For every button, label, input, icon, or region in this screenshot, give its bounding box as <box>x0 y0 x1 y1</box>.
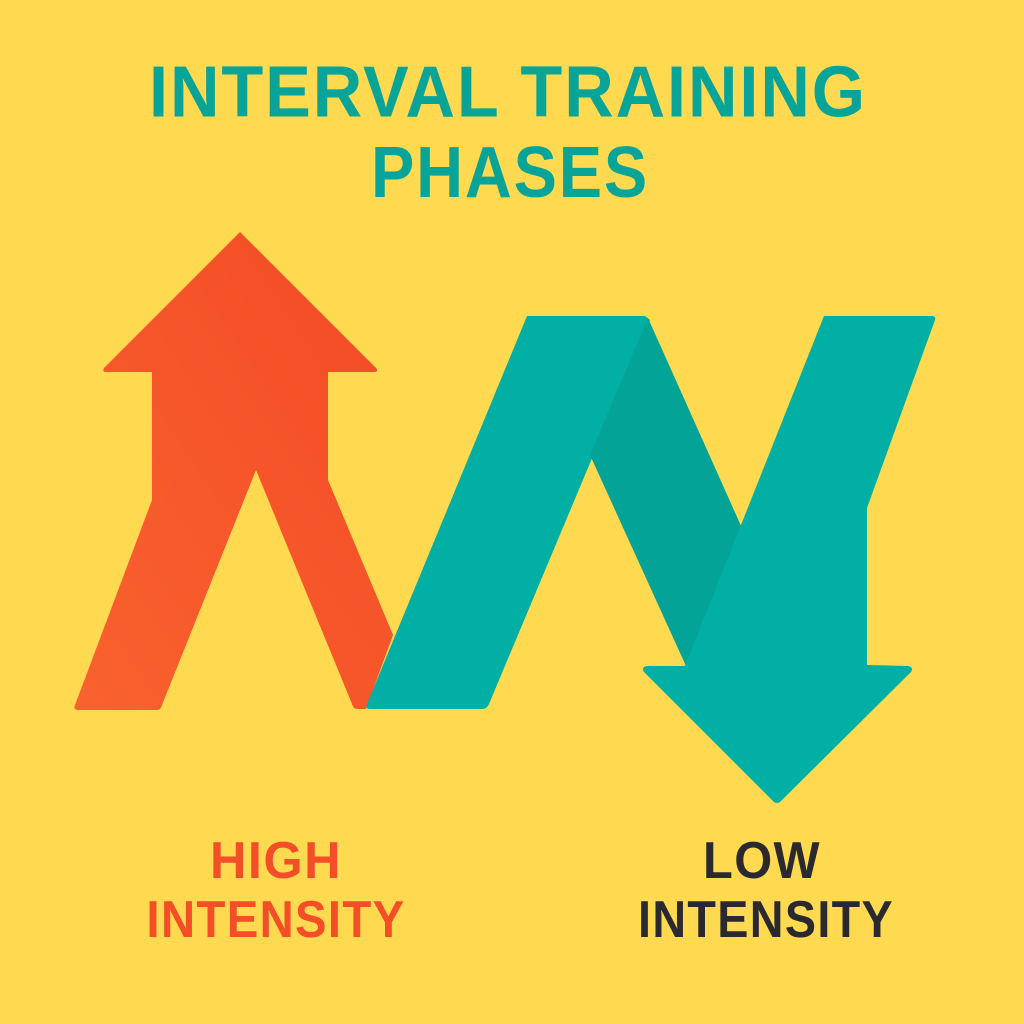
title <box>149 52 867 213</box>
label: high intensity: INTENSITY <box>146 891 406 949</box>
label: low intensity <box>638 832 894 949</box>
label: low intensity: INTENSITY <box>638 891 894 949</box>
first teal rising band <box>366 316 650 709</box>
title: INTERVAL TRAINING <box>149 52 867 132</box>
label: low intensity: LOW <box>703 832 821 890</box>
teal descending arrow <box>643 316 935 803</box>
arrow: low intensity (teal, zigzag down) <box>366 316 935 803</box>
title: PHASES <box>371 133 649 213</box>
label: high intensity <box>146 832 406 949</box>
darker fold band <box>590 318 742 666</box>
arrow: high intensity (orange, up) <box>74 232 393 710</box>
label: high intensity: HIGH <box>210 832 342 890</box>
